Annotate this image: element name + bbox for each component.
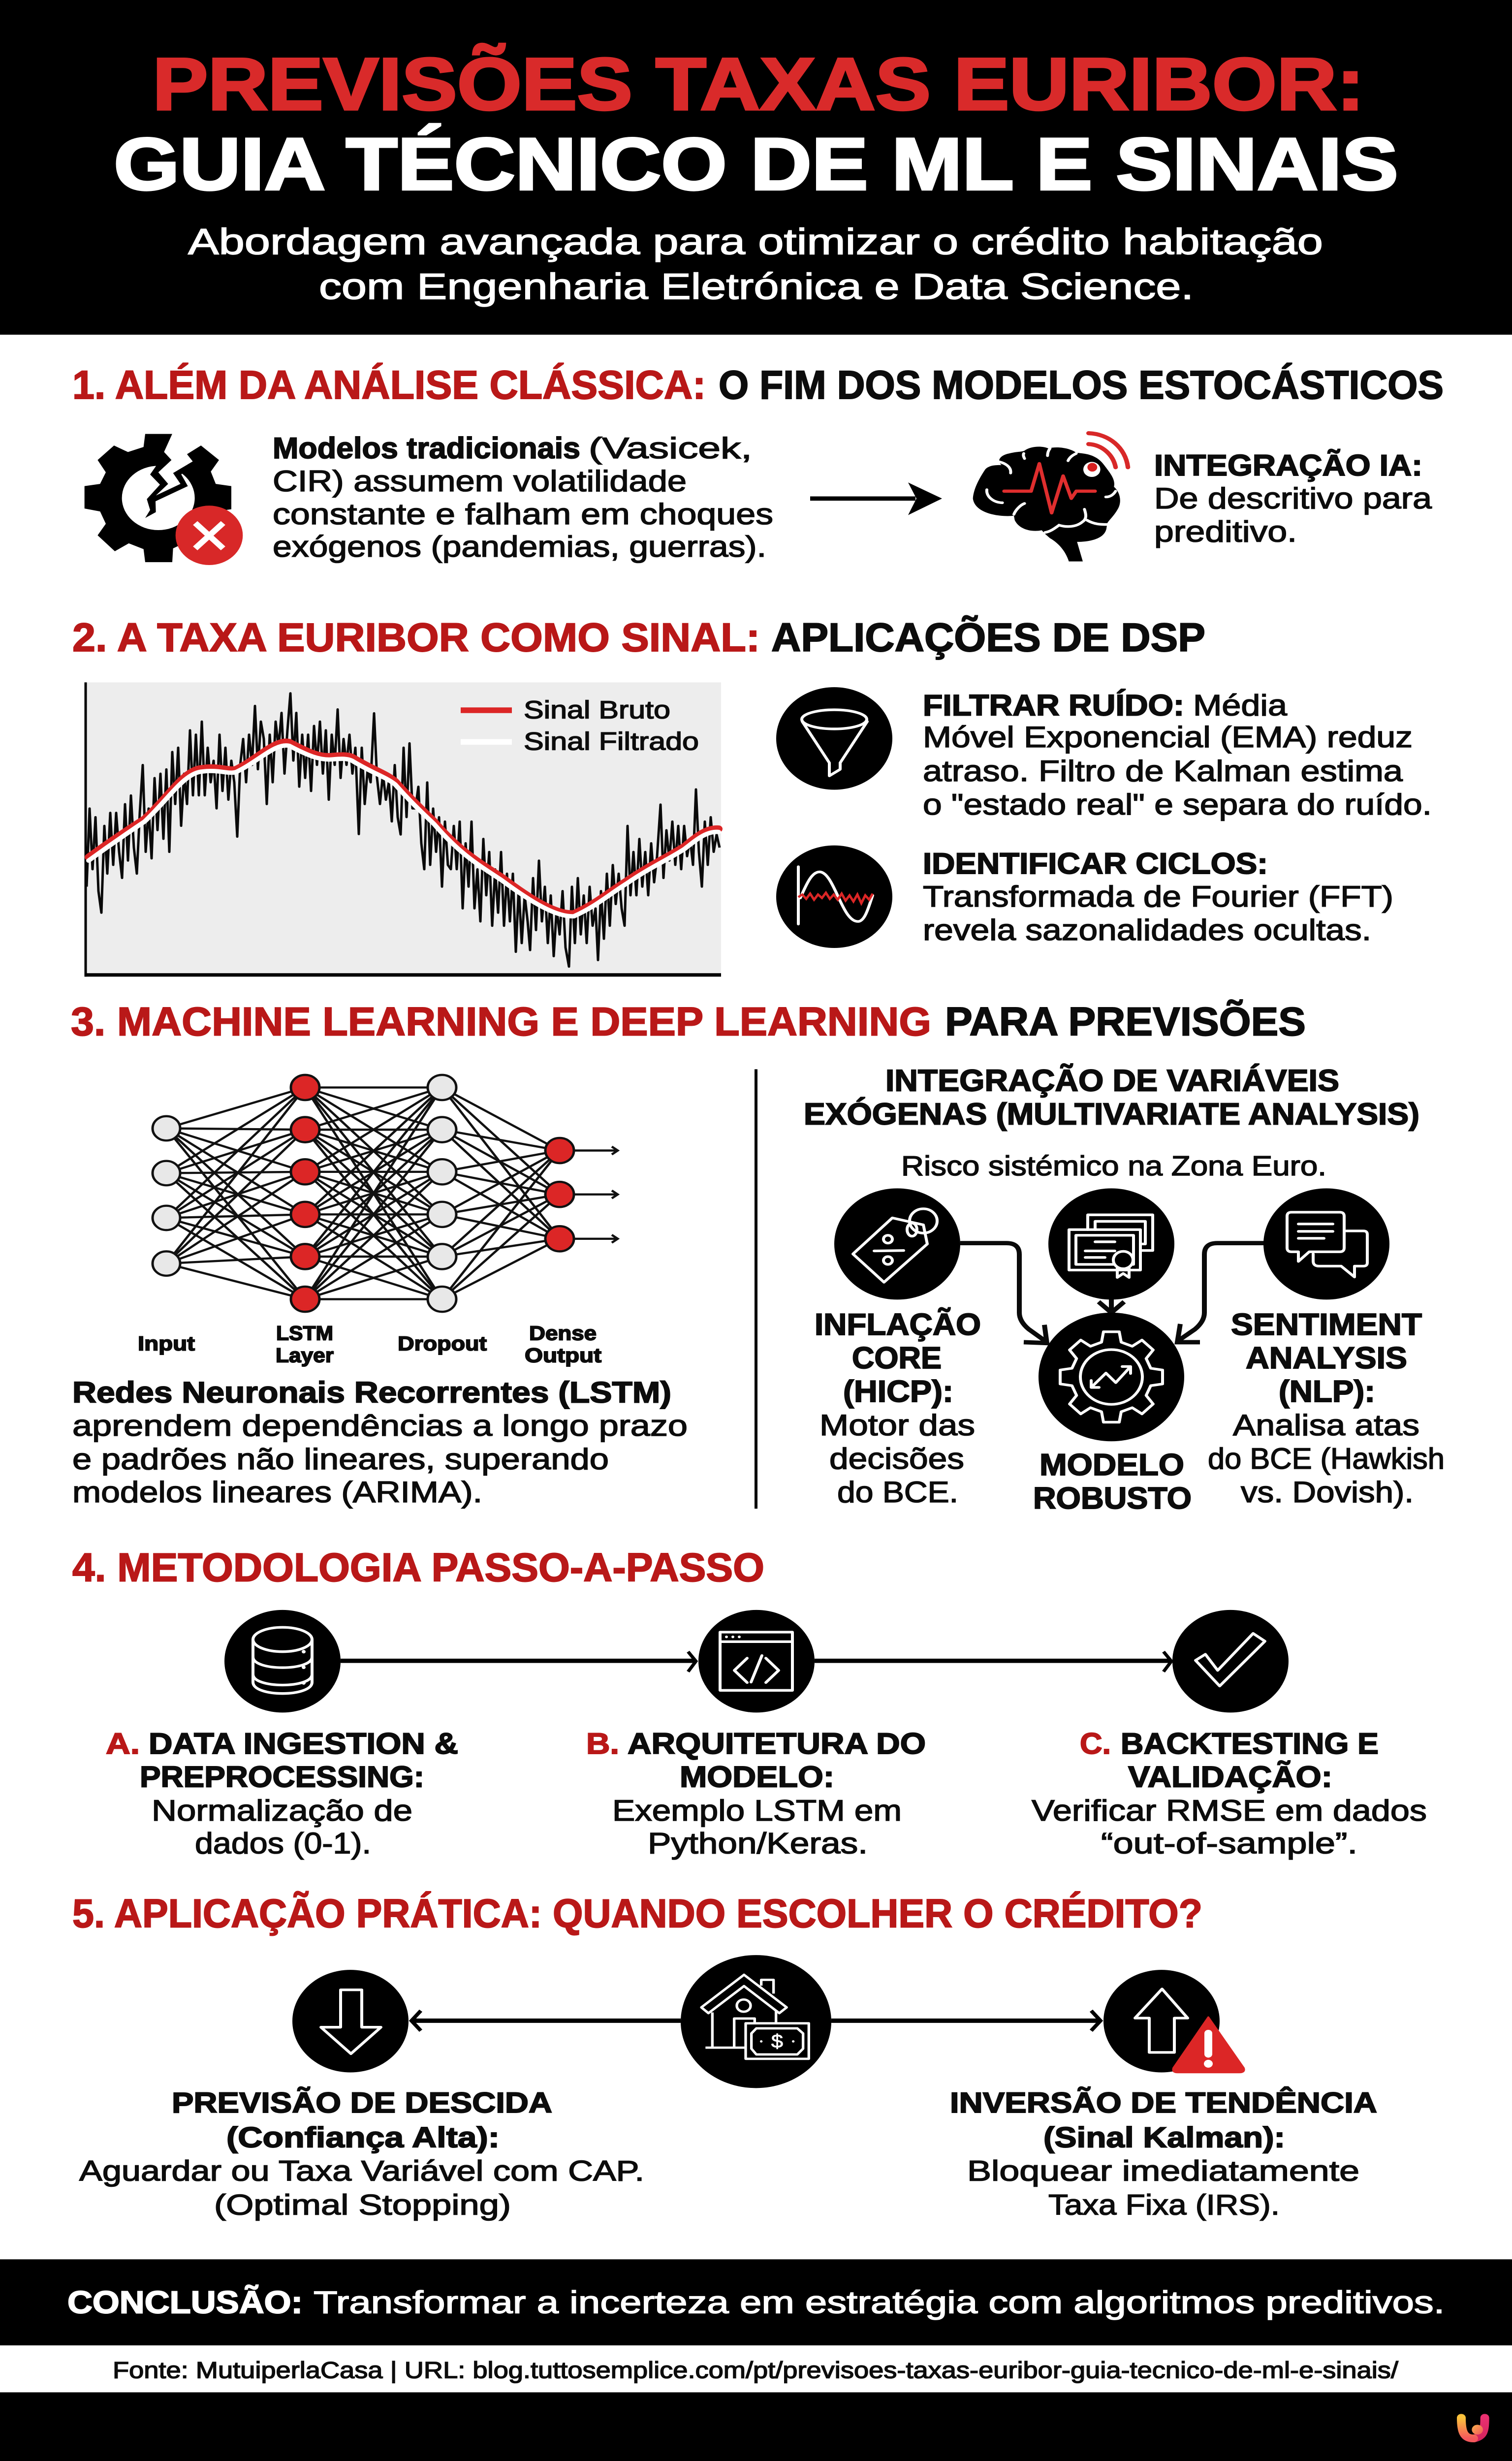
layer labels: [138, 1323, 601, 1367]
conclusion banner: CONCLUSÃO:: [67, 2285, 303, 2320]
text: LSTM explanation: aprendem dependências a longo prazo: [72, 1409, 688, 1442]
text: AI integration: preditivo.: [1154, 515, 1297, 548]
text: trend reversal: INVERSÃO DE TENDÊNCIA: [950, 2086, 1377, 2119]
icon: robust model gear: [1039, 1313, 1184, 1441]
subtitle: Abordagem avançada para otimizar o crédito habitação: [188, 221, 1323, 262]
text: trend reversal: Bloquear imediatamente: [967, 2155, 1359, 2187]
text: falling forecast: Aguardar ou Taxa Variável com CAP.: [79, 2155, 644, 2187]
step A: PREPROCESSING:: [140, 1760, 424, 1793]
text: LSTM explanation: Redes Neuronais Recorrentes (LSTM): [72, 1376, 671, 1409]
text: robust model: ROBUSTO: [1033, 1481, 1192, 1515]
step B: MODELO:: [680, 1760, 834, 1793]
text: core inflation: [815, 1307, 981, 1509]
text: robust model: [1033, 1448, 1192, 1515]
vertical divider: [755, 1069, 757, 1509]
bottom black bar: [0, 2392, 1512, 2461]
icon: sine wave: [776, 846, 892, 948]
text: core inflation: decisões: [829, 1442, 964, 1475]
text: sentiment analysis: (NLP):: [1279, 1374, 1375, 1408]
text: filter noise: [923, 689, 1432, 821]
step C: C.: [1080, 1727, 1111, 1760]
section 2 heading: 2. A TAXA EURIBOR COMO SINAL:: [72, 615, 760, 660]
dropout nodes: [428, 1075, 456, 1312]
step A: Normalização de: [152, 1794, 412, 1827]
step B: [586, 1727, 926, 1860]
text: identify cycles: IDENTIFICAR CICLOS:: [923, 847, 1268, 880]
step A: [106, 1727, 458, 1860]
title: PREVISÕES TAXAS EURIBOR:: [153, 43, 1364, 125]
text: trend reversal: (Sinal Kalman):: [1043, 2122, 1285, 2154]
text: filter noise: Média: [1193, 689, 1287, 722]
text: sentiment analysis: [1208, 1307, 1445, 1509]
icon: house and money: [681, 1955, 831, 2088]
icon: checkmark: [1172, 1610, 1289, 1712]
text: AI integration: [1154, 449, 1432, 548]
network connections: [166, 1087, 560, 1299]
icon: warning triangle: [1173, 2017, 1244, 2073]
filtered signal line: [89, 742, 719, 916]
heading: exogenous variables: EXÓGENAS (MULTIVARIATE ANALYSIS): [804, 1097, 1419, 1131]
layer labels: LSTM: [276, 1323, 333, 1345]
layer labels: Dense: [529, 1323, 597, 1345]
header banner: [0, 0, 1512, 335]
text: AI integration: De descritivo para: [1154, 482, 1432, 515]
step C: [1032, 1727, 1427, 1860]
icon: database: [224, 1610, 341, 1712]
layer labels: Output: [525, 1345, 601, 1367]
text: LSTM explanation: modelos lineares (ARIMA).: [72, 1476, 482, 1509]
icon: chat bubbles: [1263, 1188, 1389, 1299]
icon: broken gear with red X: [85, 434, 243, 565]
text: identify cycles: [923, 847, 1393, 947]
text: core inflation: CORE: [852, 1341, 942, 1375]
text: trend reversal: Taxa Fixa (IRS).: [1048, 2189, 1280, 2221]
step A: dados (0-1).: [195, 1827, 371, 1860]
process arrows: [341, 1652, 1171, 1672]
text: core inflation: (HICP):: [843, 1374, 953, 1408]
text: traditional models: CIR) assumem volatilidade: [273, 465, 687, 498]
step C: “out-of-sample”.: [1101, 1827, 1357, 1860]
arrow: classic to AI: [810, 482, 942, 515]
conclusion banner: [0, 2259, 1512, 2345]
raw signal line: [87, 694, 720, 967]
section 3 heading: 3. MACHINE LEARNING E DEEP LEARNING: [71, 999, 931, 1044]
text: identify cycles: revela sazonalidades ocultas.: [923, 914, 1371, 947]
text: sentiment analysis: do BCE (Hawkish: [1208, 1442, 1445, 1475]
text: traditional models: Modelos tradicionais: [273, 431, 580, 465]
source footer text: Fonte: MutuiperlaCasa | URL: blog.tuttosemplice.com/pt/previsoes-taxas-euribor-guia-tecnico-de-ml-e-sinais/: [113, 2357, 1399, 2383]
connectors to model: [960, 1243, 1264, 1343]
neural network diagram: [138, 1075, 618, 1367]
text: sentiment analysis: ANALYSIS: [1246, 1341, 1407, 1375]
text: core inflation: Motor das: [819, 1409, 975, 1442]
chart legend: Sinal Filtrado: [524, 727, 699, 756]
text: falling forecast: (Confiança Alta):: [226, 2122, 500, 2154]
icon: down arrow: [292, 1970, 409, 2073]
icon: price tag: [834, 1188, 960, 1299]
text: falling forecast: PREVISÃO DE DESCIDA: [172, 2086, 552, 2119]
text: LSTM explanation: e padrões não lineares, superando: [72, 1443, 609, 1476]
section 2 heading: APLICAÇÕES DE DSP: [771, 615, 1205, 660]
text: traditional models: (Vasicek,: [589, 431, 752, 465]
section 1 heading: 1. ALÉM DA ANÁLISE CLÁSSICA:: [72, 363, 706, 408]
icon: code window: [698, 1610, 815, 1712]
subtitle: [188, 221, 1323, 307]
text: filter noise: Móvel Exponencial (EMA) reduz: [923, 721, 1413, 754]
text: traditional models: constante e falham em choques: [273, 498, 773, 531]
text: sentiment analysis: SENTIMENT: [1231, 1307, 1422, 1341]
text: falling forecast: (Optimal Stopping): [214, 2189, 511, 2221]
section 4 heading: 4. METODOLOGIA PASSO-A-PASSO: [72, 1546, 764, 1590]
step B: Exemplo LSTM em: [612, 1794, 902, 1827]
text: AI integration: INTEGRAÇÃO IA:: [1154, 449, 1422, 482]
icon: brain with pulse: [973, 433, 1128, 562]
text: sentiment analysis: vs. Dovish).: [1241, 1476, 1414, 1509]
text: robust model: MODELO: [1040, 1448, 1184, 1482]
layer labels: Dropout: [398, 1333, 487, 1355]
text: falling forecast: [79, 2086, 644, 2221]
icon: house and money: $: [771, 2030, 783, 2051]
section 5 heading: 5. APLICAÇÃO PRÁTICA: QUANDO ESCOLHER O CRÉDITO?: [72, 1892, 1202, 1936]
section 3 heading: PARA PREVISÕES: [945, 999, 1306, 1044]
text: traditional models: exógenos (pandemias, guerras).: [273, 530, 766, 563]
layer labels: Layer: [276, 1345, 334, 1367]
step B: Python/Keras.: [648, 1827, 868, 1860]
text: LSTM explanation: [72, 1376, 688, 1509]
input nodes: [153, 1116, 180, 1276]
icon: logo: [1461, 2418, 1485, 2438]
step C: BACKTESTING E: [1121, 1727, 1379, 1760]
text: sentiment analysis: Analisa atas: [1233, 1409, 1419, 1442]
output arrows: [560, 1147, 618, 1243]
heading: exogenous variables: [804, 1063, 1419, 1131]
decision arrows: [411, 2011, 1101, 2031]
text: core inflation: INFLAÇÃO: [815, 1307, 981, 1341]
step B: ARQUITETURA DO: [628, 1727, 926, 1760]
heading: exogenous variables: INTEGRAÇÃO DE VARIÁVEIS: [885, 1063, 1339, 1098]
title: [114, 43, 1398, 205]
text: filter noise: FILTRAR RUÍDO:: [923, 689, 1184, 722]
icon: funnel: [776, 687, 892, 790]
step A: DATA INGESTION &: [149, 1727, 458, 1760]
chart legend: [461, 695, 699, 756]
text: core inflation: do BCE.: [837, 1476, 958, 1509]
text: filter noise: o "estado real" e separa do ruído.: [923, 788, 1432, 821]
conclusion banner: Transformar a incerteza em estratégia com algoritmos preditivos.: [314, 2286, 1445, 2320]
LSTM nodes: [291, 1075, 319, 1312]
title: GUIA TÉCNICO DE ML E SINAIS: [114, 123, 1398, 205]
section 1 heading: [72, 363, 1444, 408]
icon: up arrow with warning: [1103, 1970, 1244, 2073]
step C: VALIDAÇÃO:: [1128, 1760, 1332, 1793]
text: trend reversal: [950, 2086, 1377, 2221]
section 2 heading: [72, 615, 1205, 660]
text: filter noise: atraso. Filtro de Kalman estima: [923, 755, 1403, 788]
layer labels: Input: [138, 1333, 195, 1355]
text: identify cycles: Transformada de Fourier (FFT): [923, 880, 1393, 913]
icon: certificates: [1048, 1188, 1174, 1299]
step B: B.: [586, 1727, 619, 1760]
step A: A.: [106, 1727, 140, 1760]
subtitle: com Engenharia Eletrónica e Data Science.: [319, 266, 1194, 307]
chart legend: Sinal Bruto: [524, 695, 670, 724]
chart: raw vs filtered signal: [85, 682, 721, 977]
text: traditional models: [273, 431, 773, 563]
output nodes: [545, 1138, 574, 1251]
text: systemic risk: Risco sistémico na Zona Euro.: [901, 1150, 1326, 1181]
step C: Verificar RMSE em dados: [1032, 1794, 1427, 1827]
